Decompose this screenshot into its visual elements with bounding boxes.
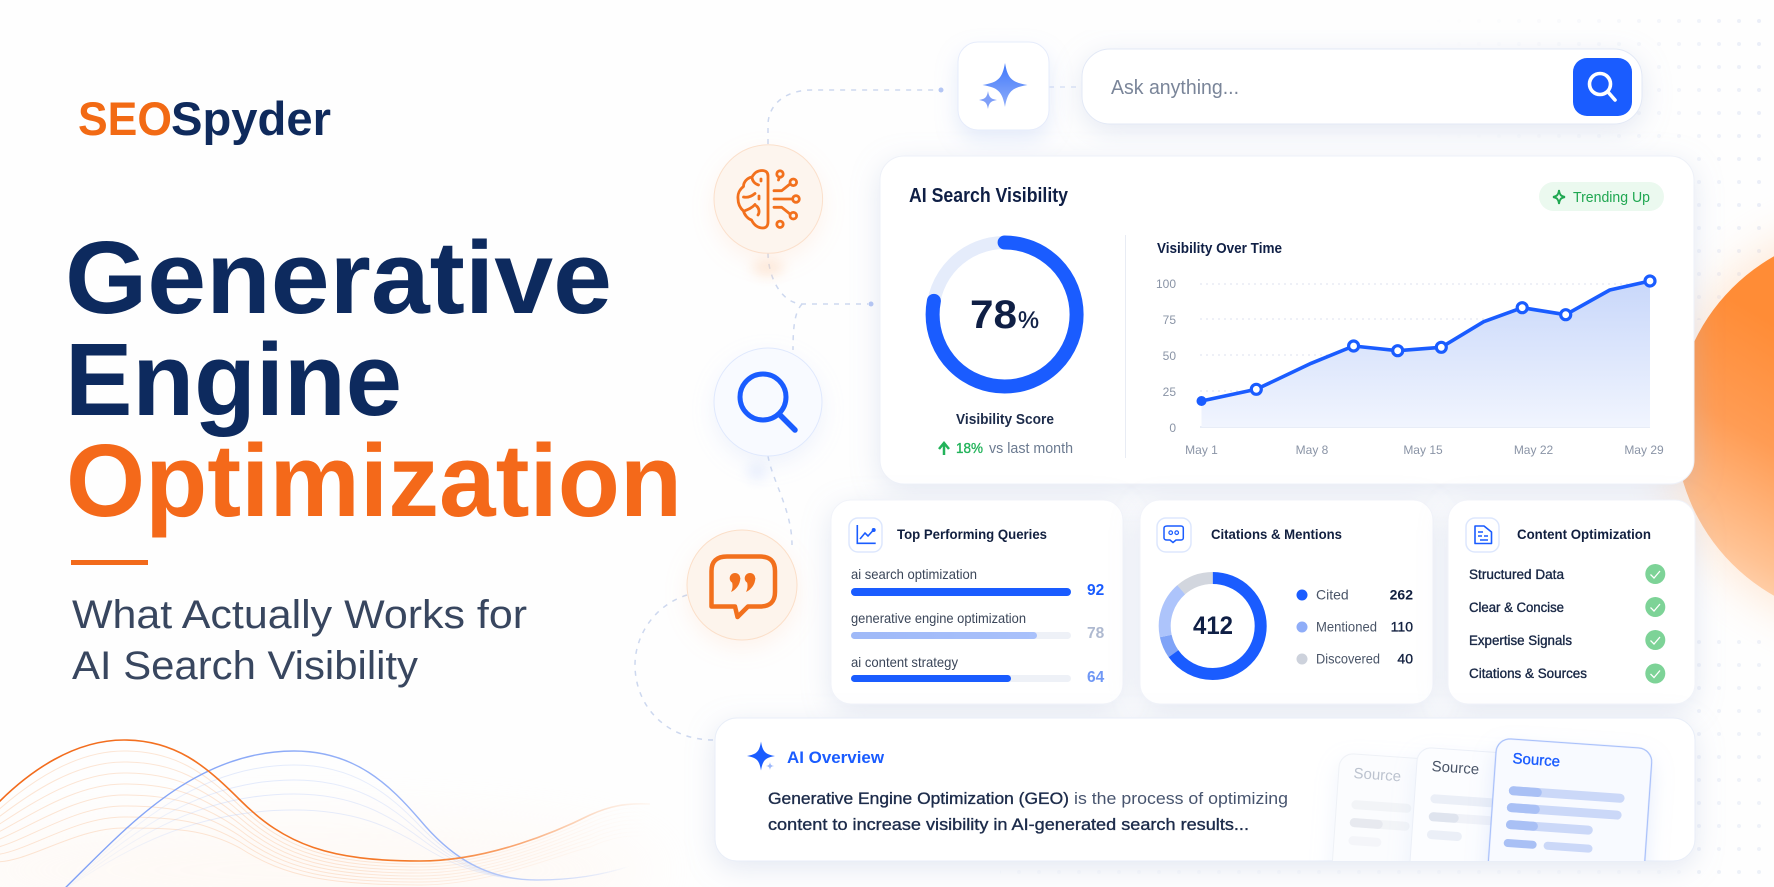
- trending badge: [1539, 182, 1664, 211]
- line chart: visibility over time: May 15: [1403, 443, 1443, 457]
- sparkle tile: [958, 42, 1049, 130]
- query row 1: ai search optimization: [851, 566, 977, 582]
- source cards: [1332, 738, 1656, 861]
- overview text: is the process of optimizing: [1074, 790, 1288, 808]
- source card: back: Source: [1353, 765, 1402, 785]
- donut: visibility score: %: [1018, 307, 1039, 334]
- query row 2: [851, 610, 1105, 642]
- legend: 40: [1397, 650, 1413, 666]
- panel: citations and mentions: [1140, 500, 1433, 704]
- query row 1: [851, 566, 1104, 599]
- legend: 262: [1390, 586, 1413, 602]
- panel heading: AI Search Visibility: [909, 185, 1069, 207]
- source card: middle: [1410, 748, 1496, 861]
- checklist: Clear & Concise: [1469, 600, 1564, 615]
- legend: 110: [1391, 618, 1413, 634]
- month-on-month change: 18%: [956, 440, 983, 457]
- icon: sparkle: [747, 742, 775, 770]
- subtitle: AI Search Visibility: [72, 644, 418, 688]
- logo: Spyder: [171, 92, 331, 145]
- check marks: [1645, 564, 1665, 684]
- search bar: [1082, 49, 1642, 124]
- donut: citations total: 412: [1193, 612, 1233, 640]
- line chart: visibility over time: [1156, 241, 1664, 457]
- query row 2: generative engine optimization: [851, 610, 1026, 626]
- panel: top performing queries: [831, 500, 1123, 704]
- month-on-month change: vs last month: [989, 440, 1073, 457]
- source card: middle: Source: [1431, 758, 1480, 778]
- overview heading: AI Overview: [787, 748, 885, 767]
- legend: [1296, 586, 1413, 666]
- donut: visibility score: 78: [970, 293, 1017, 337]
- decorative waves: [0, 740, 650, 887]
- subtitle: What Actually Works for: [72, 593, 527, 637]
- icon: trend chart: [849, 518, 882, 552]
- icon: magnifier: [714, 348, 822, 481]
- dashed connectors: [635, 87, 1082, 740]
- query row 3: [851, 654, 1105, 686]
- source card: back: [1332, 754, 1417, 861]
- trending badge: Trending Up: [1573, 189, 1650, 206]
- overview text: [768, 790, 1288, 834]
- legend: Discovered: [1316, 650, 1380, 666]
- line chart: visibility over time: May 22: [1514, 443, 1553, 457]
- checklist: Structured Data: [1469, 567, 1564, 582]
- overview text: content to increase visibility in AI-generated search results...: [768, 816, 1249, 834]
- logo: SEO: [78, 92, 172, 145]
- visibility score label: Visibility Score: [956, 412, 1054, 428]
- panel: content optimization: [1448, 500, 1695, 704]
- icon: brain: [714, 145, 823, 276]
- panel heading: Top Performing Queries: [897, 526, 1047, 542]
- line chart: visibility over time: 25: [1163, 385, 1176, 399]
- overview text: Generative Engine Optimization (GEO): [768, 790, 1069, 808]
- search bar: Ask anything...: [1111, 77, 1239, 99]
- panel: AI overview: [715, 718, 1695, 887]
- line chart: visibility over time: 50: [1163, 349, 1176, 363]
- line chart: visibility over time: May 29: [1624, 443, 1664, 457]
- logo: [78, 92, 331, 145]
- source card: front: Source: [1512, 750, 1561, 770]
- query row 3: 64: [1087, 669, 1105, 686]
- orange circle: [1665, 221, 1774, 631]
- checklist: Expertise Signals: [1469, 633, 1572, 648]
- month-on-month change: [939, 440, 1073, 457]
- legend: Cited: [1316, 586, 1349, 602]
- subtitle: [72, 593, 527, 688]
- line chart: visibility over time: 75: [1163, 313, 1176, 327]
- icon: chat: [1157, 518, 1191, 552]
- line chart: visibility over time: May 1: [1185, 443, 1218, 457]
- checklist: [1469, 567, 1587, 681]
- line chart: visibility over time: 100: [1156, 277, 1176, 291]
- source card: front: [1483, 738, 1656, 861]
- line chart: visibility over time: Visibility Over Time: [1157, 241, 1282, 257]
- query row 2: 78: [1087, 625, 1105, 642]
- query row 3: ai content strategy: [851, 654, 958, 670]
- panel heading: Content Optimization: [1517, 526, 1651, 542]
- line chart: visibility over time: May 8: [1296, 443, 1329, 457]
- title: Generative: [65, 220, 612, 335]
- panel: AI search visibility: [880, 156, 1694, 484]
- icon: document: [1466, 518, 1499, 552]
- line chart: visibility over time: 0: [1169, 421, 1176, 435]
- checklist: Citations & Sources: [1469, 666, 1587, 681]
- panel heading: Citations & Mentions: [1211, 526, 1342, 542]
- title: Optimization: [66, 423, 682, 538]
- title: Engine: [65, 322, 402, 437]
- donut: visibility score: [933, 242, 1077, 386]
- divider rule: [71, 560, 148, 565]
- donut: citations total: [1145, 558, 1280, 694]
- title: [65, 220, 682, 538]
- query row 1: 92: [1087, 582, 1104, 599]
- legend: Mentioned: [1316, 618, 1377, 634]
- icon: quote bubble: [687, 530, 797, 640]
